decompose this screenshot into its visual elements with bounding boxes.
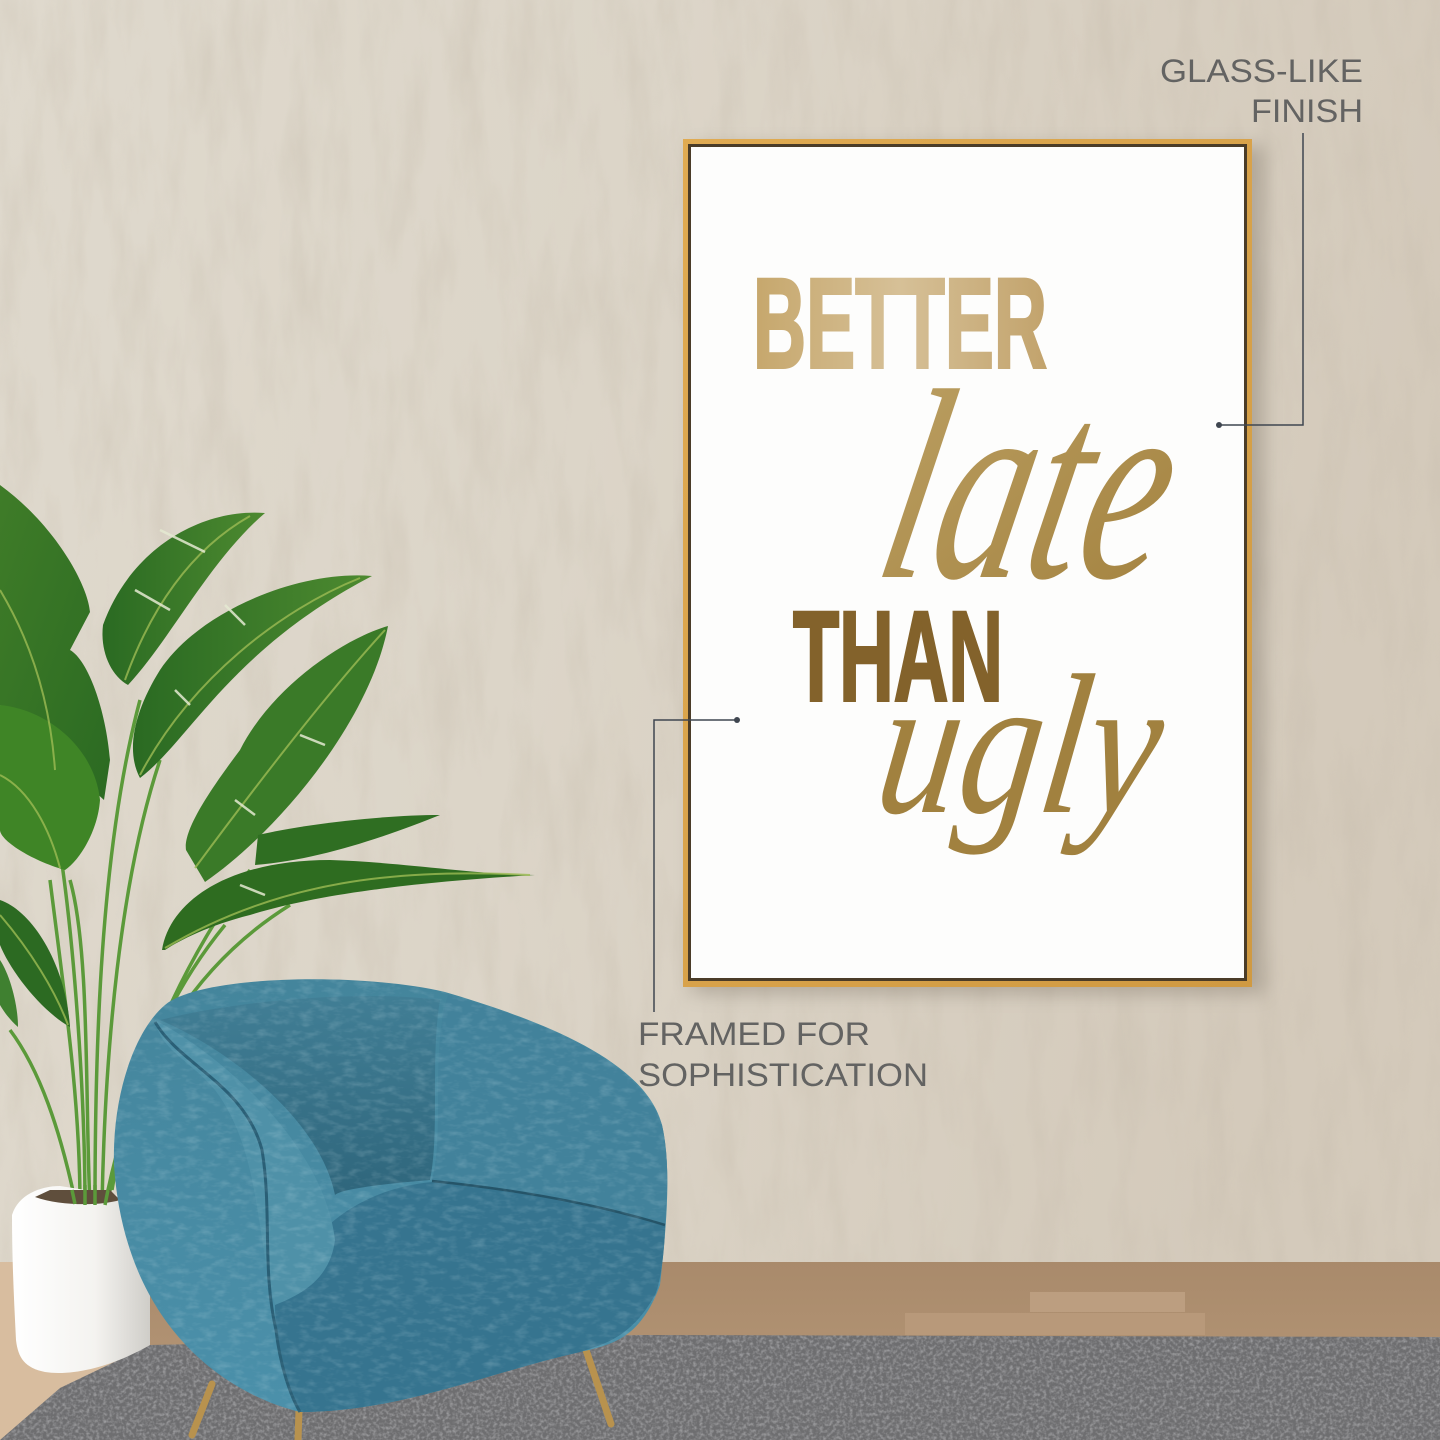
chair backrest interior [160, 996, 440, 1195]
chair piping [155, 1022, 300, 1412]
leaf [255, 815, 440, 865]
leader line [1220, 133, 1303, 425]
leaf [0, 900, 70, 1027]
leaf [133, 575, 372, 778]
word: ugly: ugly [866, 635, 1178, 856]
frame shadow [692, 146, 1264, 994]
chair back right panel [432, 995, 667, 1224]
label: FRAMED FOR [638, 1016, 870, 1052]
white canvas [691, 147, 1244, 978]
plant stems [10, 700, 290, 1205]
word: THAN: THAN [793, 586, 1003, 728]
potted plant [0, 485, 535, 1373]
label [1160, 53, 1363, 129]
chair legs [192, 1350, 611, 1440]
pot soil [35, 1190, 120, 1204]
word: late: late [859, 336, 1205, 636]
leaf midribs [0, 516, 530, 1025]
leaf [0, 960, 18, 1027]
label: FINISH [1251, 93, 1363, 129]
chair fabric texture [110, 975, 675, 1415]
white leaf markings [135, 530, 325, 895]
word: BETTER: BETTER [753, 252, 1047, 396]
callout: framed for sophistication [638, 717, 928, 1093]
gold frame [683, 139, 1252, 987]
label: GLASS-LIKE [1160, 53, 1363, 89]
framed artwork [683, 139, 1252, 987]
grey rug [0, 1335, 1440, 1440]
chair arm [155, 1020, 335, 1305]
leaf [0, 705, 100, 870]
label [638, 1016, 928, 1093]
leaf [102, 513, 265, 685]
leader line [654, 720, 738, 1012]
leaf [0, 485, 110, 800]
leaf [186, 626, 388, 882]
white pot [12, 1186, 150, 1373]
chair seat [275, 1182, 665, 1412]
callout: glass-like finish [1160, 53, 1363, 428]
label: SOPHISTICATION [638, 1057, 928, 1093]
chair body [114, 979, 667, 1412]
blue armchair [110, 975, 675, 1440]
wood floor [0, 1262, 1440, 1440]
leaf [162, 860, 535, 950]
chair seat seam [432, 1181, 665, 1225]
